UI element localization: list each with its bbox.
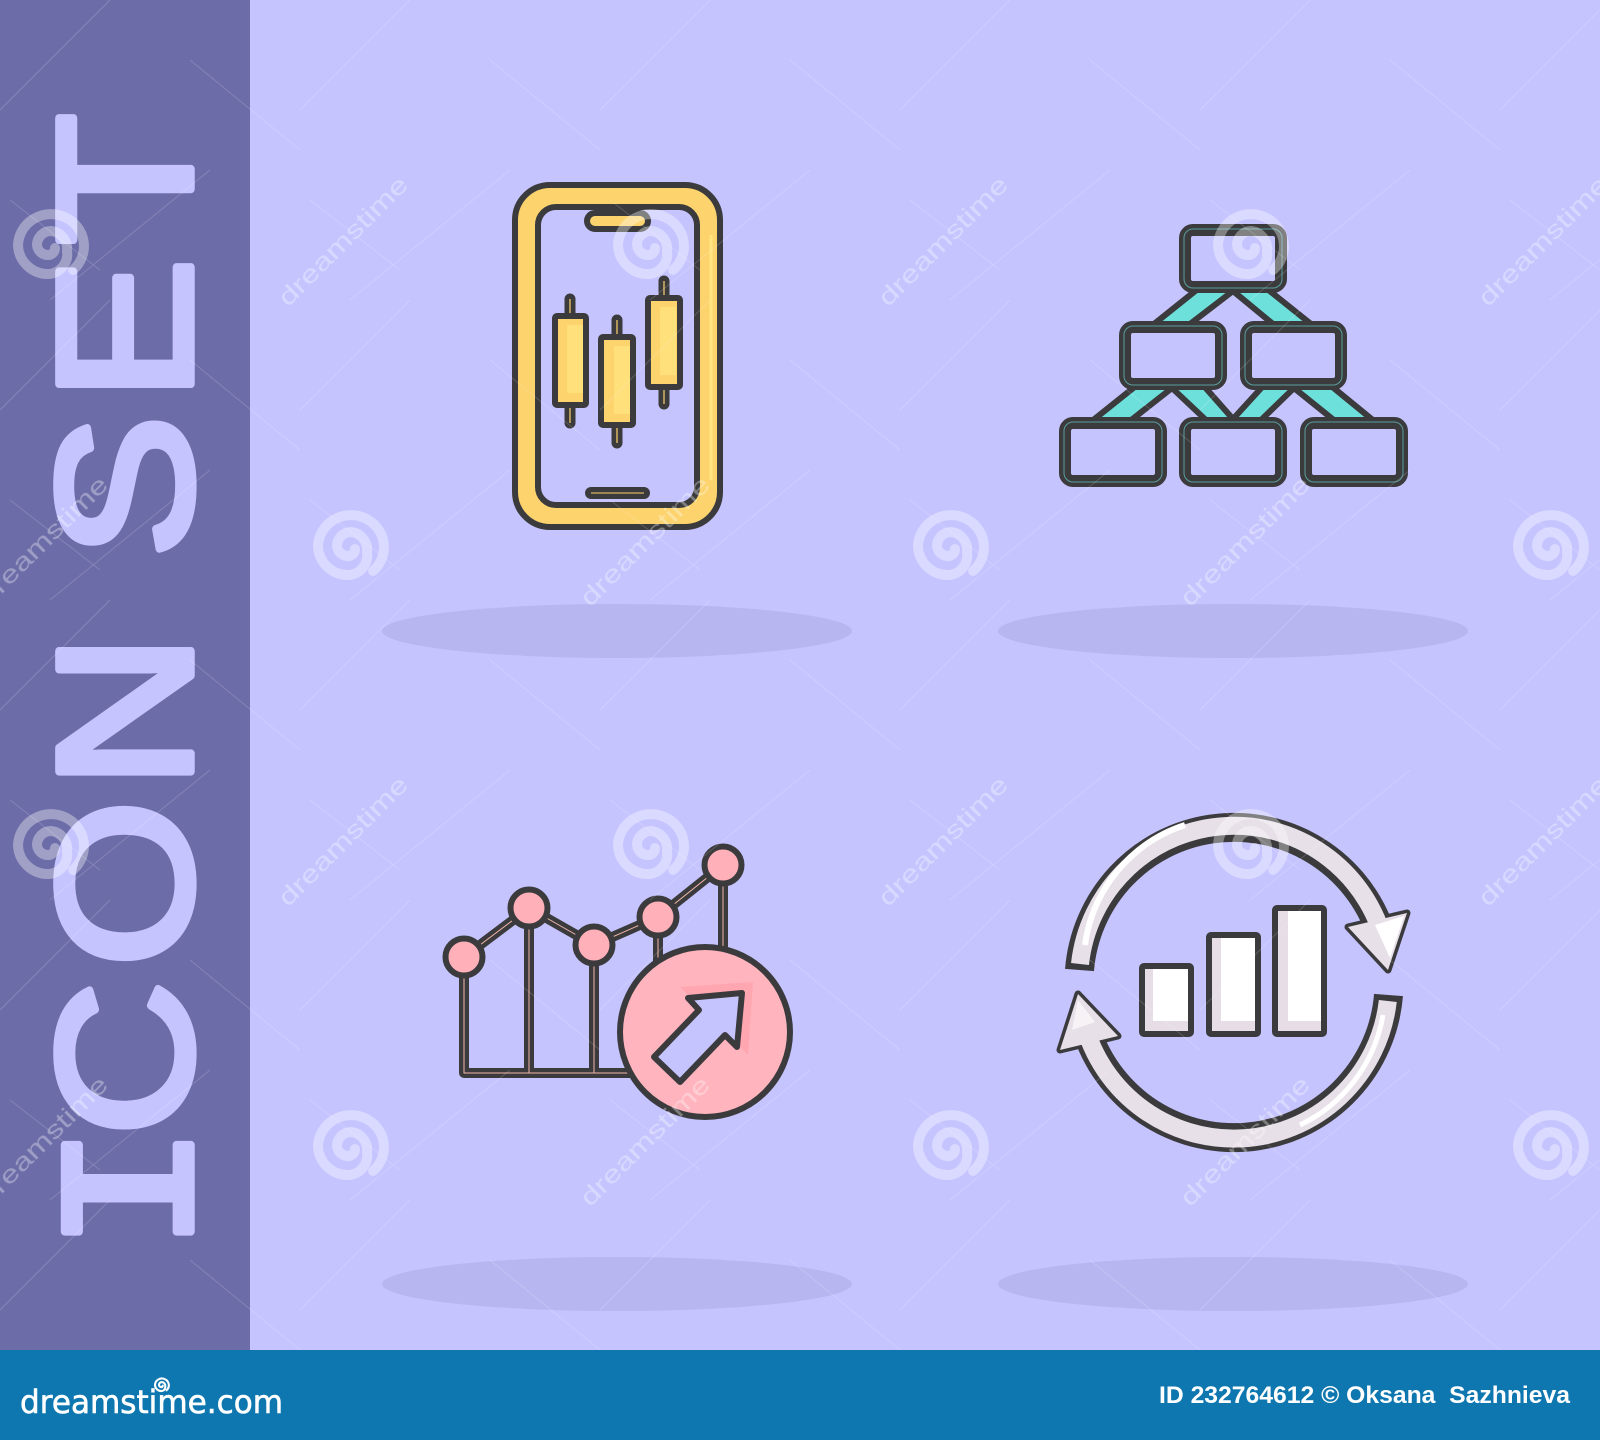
node highlight lines: [1064, 229, 1403, 482]
icon: mobile phone with candlestick chart: [515, 185, 720, 527]
cycle arc: top: [1080, 825, 1407, 970]
watermark overlay: dreamstime: [575, 1071, 716, 1212]
watermark overlay: dreamstime: [1175, 471, 1316, 612]
watermark overlay: dreamstime: [575, 471, 716, 612]
sidebar panel: [0, 0, 250, 1350]
watermark overlay: dreamstime: [1175, 1071, 1316, 1212]
icon: cycle arrows with bar chart: [1060, 825, 1407, 1139]
footer image ID and credit: ID 232764612 © Oksana Sazhnieva: [1159, 1382, 1571, 1409]
watermark overlay: dreamstime: [273, 771, 414, 912]
footer bar: [0, 1350, 1600, 1440]
shadow under growth chart icon: [382, 1257, 852, 1311]
watermark overlay: dreamstime: [873, 171, 1014, 312]
shadow under phone icon: [382, 604, 852, 658]
sidebar title: ICON SET: CON SET: [18, 113, 232, 1136]
cycle arc: bottom: [1060, 994, 1388, 1139]
shadow under hierarchy icon: [998, 604, 1468, 658]
watermark overlay: dreamstime: [1473, 171, 1600, 312]
icon: hierarchy diagram: [1064, 229, 1403, 482]
sidebar title: ICON SET: I: [32, 1124, 249, 1253]
shadow under cycle chart icon: [998, 1257, 1468, 1311]
connectors: top tier: [1154, 288, 1311, 324]
footer logo: dreamstime.com: dreamstime.com: [20, 1383, 283, 1421]
hierarchy nodes: [1065, 230, 1402, 481]
connectors: lower tier: [1092, 385, 1374, 421]
watermark overlay: dreamstime: [873, 771, 1014, 912]
icon: line chart with up arrow: [446, 846, 790, 1117]
watermark overlay: dreamstime: [273, 171, 414, 312]
watermark overlay: dreamstime: [1473, 771, 1600, 912]
bar chart: [1142, 908, 1324, 1034]
